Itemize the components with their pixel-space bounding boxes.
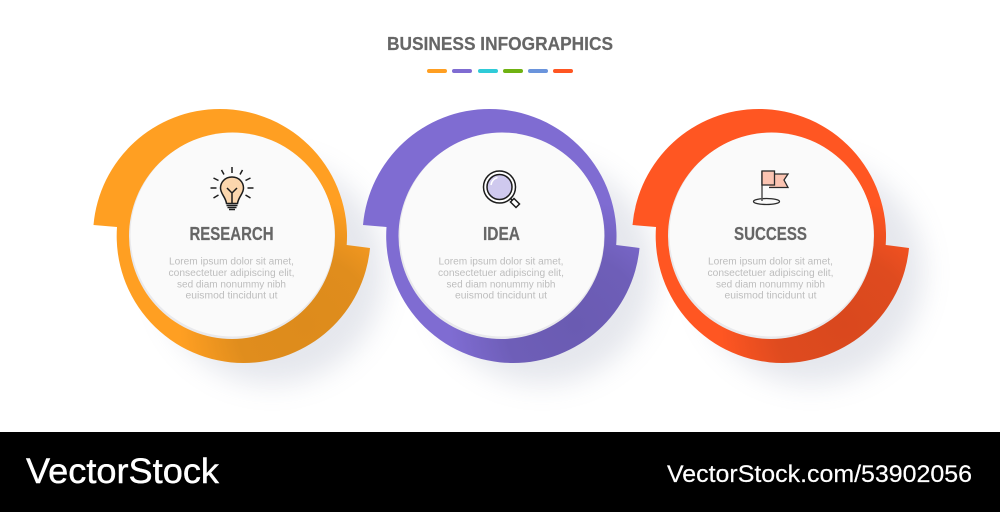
- icon: light bulb: [210, 167, 254, 210]
- footer url: VectorStock.com/53902056: [667, 461, 972, 488]
- idea heading: IDEA: [483, 224, 520, 244]
- research body text: sed diam nonummy nibh: [177, 280, 286, 290]
- research ring: [94, 109, 370, 363]
- success heading: SUCCESS: [734, 224, 807, 244]
- research body text: Lorem ipsum dolor sit amet,: [169, 256, 294, 268]
- research body text: [168, 256, 294, 302]
- research body text: euismod tincidunt ut: [186, 290, 278, 302]
- idea body text: sed diam nonummy nibh: [446, 280, 556, 290]
- success body text: euismod tincidunt ut: [724, 290, 817, 302]
- colour dashes: [427, 69, 573, 73]
- success shadow: [699, 160, 923, 384]
- panel: idea: [363, 109, 654, 384]
- research circle shadow: [129, 133, 335, 339]
- success body text: consectetuer adipiscing elit,: [708, 268, 834, 279]
- footer logo: VectorStock: [26, 452, 220, 491]
- idea body text: consectetuer adipiscing elit,: [438, 268, 564, 279]
- success body text: Lorem ipsum dolor sit amet,: [708, 256, 833, 268]
- icon: magnifier: [484, 171, 520, 208]
- idea body text: Lorem ipsum dolor sit amet,: [438, 256, 564, 268]
- idea body text: [438, 256, 564, 302]
- research body text: consectetuer adipiscing elit,: [168, 268, 294, 279]
- success body text: sed diam nonummy nibh: [716, 280, 825, 290]
- title: BUSINESS INFOGRAPHICS: [387, 34, 613, 54]
- success circle shadow: [668, 133, 874, 339]
- panel: success: [632, 109, 923, 384]
- panel: research: [94, 109, 384, 384]
- research shadow: [160, 160, 384, 384]
- success circle: [670, 132, 874, 336]
- research heading: RESEARCH: [190, 224, 274, 244]
- success ring: [632, 109, 909, 363]
- success body text: [708, 256, 834, 302]
- research circle: [130, 132, 334, 336]
- idea circle shadow: [398, 133, 604, 339]
- idea ring: [363, 109, 640, 363]
- idea circle: [400, 132, 604, 336]
- idea body text: euismod tincidunt ut: [455, 290, 547, 302]
- footer bar: [0, 432, 1000, 512]
- icon: flag: [754, 171, 788, 204]
- idea shadow: [430, 160, 654, 384]
